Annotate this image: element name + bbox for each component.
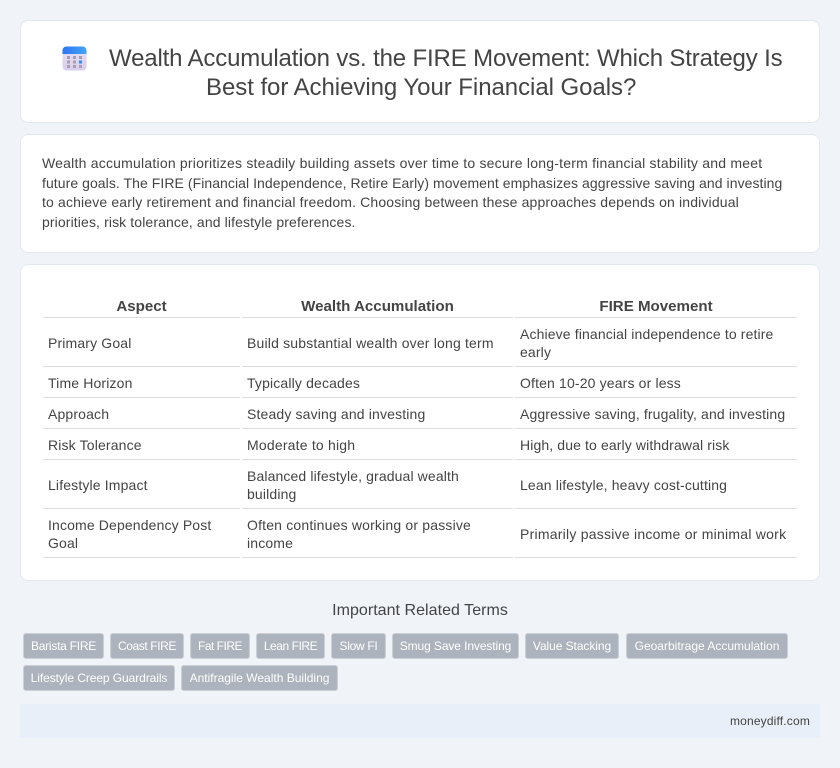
footer brand: moneydiff.com bbox=[730, 714, 810, 728]
tag: Coast FIRE: Coast FIRE bbox=[118, 639, 176, 653]
row: Income Dependency Post Goal: income bbox=[247, 535, 293, 551]
tag: Antifragile Wealth Building bbox=[181, 665, 338, 691]
row: Primary Goal: Achieve financial independence to retire bbox=[520, 326, 773, 342]
tag: Slow FI bbox=[331, 633, 386, 659]
intro text: to achieve early retirement and financial freedom. Choosing between these approaches depends on individual bbox=[42, 194, 739, 210]
tag: Geoarbitrage Accumulation bbox=[626, 633, 788, 659]
tag: Value Stacking bbox=[525, 633, 619, 659]
row: Income Dependency Post Goal: Often continues working or passive bbox=[247, 517, 471, 533]
tag: Geoarbitrage Accumulation: Geoarbitrage Accumulation bbox=[635, 639, 779, 653]
row: Primary Goal: Build substantial wealth over long term bbox=[247, 335, 494, 351]
table header: FIRE Movement: FIRE Movement bbox=[599, 298, 713, 315]
row: Primary Goal: early bbox=[520, 344, 551, 360]
table header: Wealth Accumulation: Wealth Accumulation bbox=[301, 298, 454, 315]
tag: Value Stacking: Value Stacking bbox=[533, 639, 611, 653]
row: Income Dependency Post Goal: Income Dependency Post bbox=[48, 517, 211, 533]
row: Lifestyle Impact bbox=[48, 468, 727, 502]
row: Approach bbox=[48, 406, 785, 422]
intro text: Wealth accumulation prioritizes steadily building assets over time to secure long-term financial stability and meet bbox=[42, 155, 762, 171]
tag: Coast FIRE bbox=[110, 633, 184, 659]
heading: Important Related Terms: Important Related Terms bbox=[332, 602, 508, 619]
row: Primary Goal bbox=[48, 326, 773, 360]
icon: calendar bbox=[62, 46, 86, 70]
table header: Aspect: Aspect bbox=[116, 298, 167, 315]
tag: Smug Save Investing: Smug Save Investing bbox=[400, 639, 511, 653]
title: Best for Achieving Your Financial Goals? bbox=[206, 74, 636, 101]
row: Time Horizon: Time Horizon bbox=[48, 375, 133, 391]
row: Approach: Steady saving and investing bbox=[247, 406, 425, 422]
row: Income Dependency Post Goal: Goal bbox=[48, 535, 78, 551]
row: Risk Tolerance: High, due to early withdrawal risk bbox=[520, 437, 730, 453]
intro text bbox=[42, 155, 782, 230]
tag: Lifestyle Creep Guardrails: Lifestyle Creep Guardrails bbox=[31, 671, 167, 685]
footer bar bbox=[20, 704, 820, 738]
panel: title header bbox=[20, 20, 820, 123]
tag: Slow FI: Slow FI bbox=[340, 639, 377, 653]
row: Risk Tolerance bbox=[48, 437, 730, 453]
row: Lifestyle Impact: Balanced lifestyle, gradual wealth bbox=[247, 468, 459, 484]
tag: Barista FIRE bbox=[23, 633, 104, 659]
row: Income Dependency Post Goal bbox=[48, 517, 786, 551]
row: Risk Tolerance: Risk Tolerance bbox=[48, 437, 142, 453]
row: Time Horizon: Typically decades bbox=[247, 375, 360, 391]
tag: Lean FIRE bbox=[256, 633, 325, 659]
tag row 2 bbox=[23, 665, 338, 691]
tag: Lean FIRE: Lean FIRE bbox=[264, 639, 317, 653]
row: Primary Goal: Primary Goal bbox=[48, 335, 131, 351]
row: Approach: Approach bbox=[48, 406, 109, 422]
row: Time Horizon: Often 10-20 years or less bbox=[520, 375, 681, 391]
title: Wealth Accumulation vs. the FIRE Movement: Which Strategy Is bbox=[109, 45, 782, 72]
intro text: priorities, risk tolerance, and lifestyle preferences. bbox=[42, 214, 356, 230]
tag: Antifragile Wealth Building: Antifragile Wealth Building bbox=[190, 671, 329, 685]
row: Lifestyle Impact: building bbox=[247, 486, 296, 502]
row: Approach: Aggressive saving, frugality, and investing bbox=[520, 406, 785, 422]
row: Lifestyle Impact: Lean lifestyle, heavy cost-cutting bbox=[520, 477, 727, 493]
tag: Barista FIRE: Barista FIRE bbox=[31, 639, 96, 653]
tag: Fat FIRE bbox=[190, 633, 250, 659]
row: Time Horizon bbox=[48, 375, 681, 391]
panel: introduction bbox=[20, 134, 820, 253]
row: Risk Tolerance: Moderate to high bbox=[247, 437, 355, 453]
tag: Fat FIRE: Fat FIRE bbox=[198, 639, 242, 653]
intro text: future goals. The FIRE (Financial Independence, Retire Early) movement emphasizes aggressive saving and investing bbox=[42, 174, 782, 190]
tag: Smug Save Investing bbox=[392, 633, 519, 659]
row: Income Dependency Post Goal: Primarily passive income or minimal work bbox=[520, 526, 786, 542]
tag row 1 bbox=[23, 633, 788, 659]
row: Lifestyle Impact: Lifestyle Impact bbox=[48, 477, 148, 493]
title bbox=[109, 45, 782, 101]
tag: Lifestyle Creep Guardrails bbox=[23, 665, 175, 691]
panel: comparison table bbox=[20, 264, 820, 581]
